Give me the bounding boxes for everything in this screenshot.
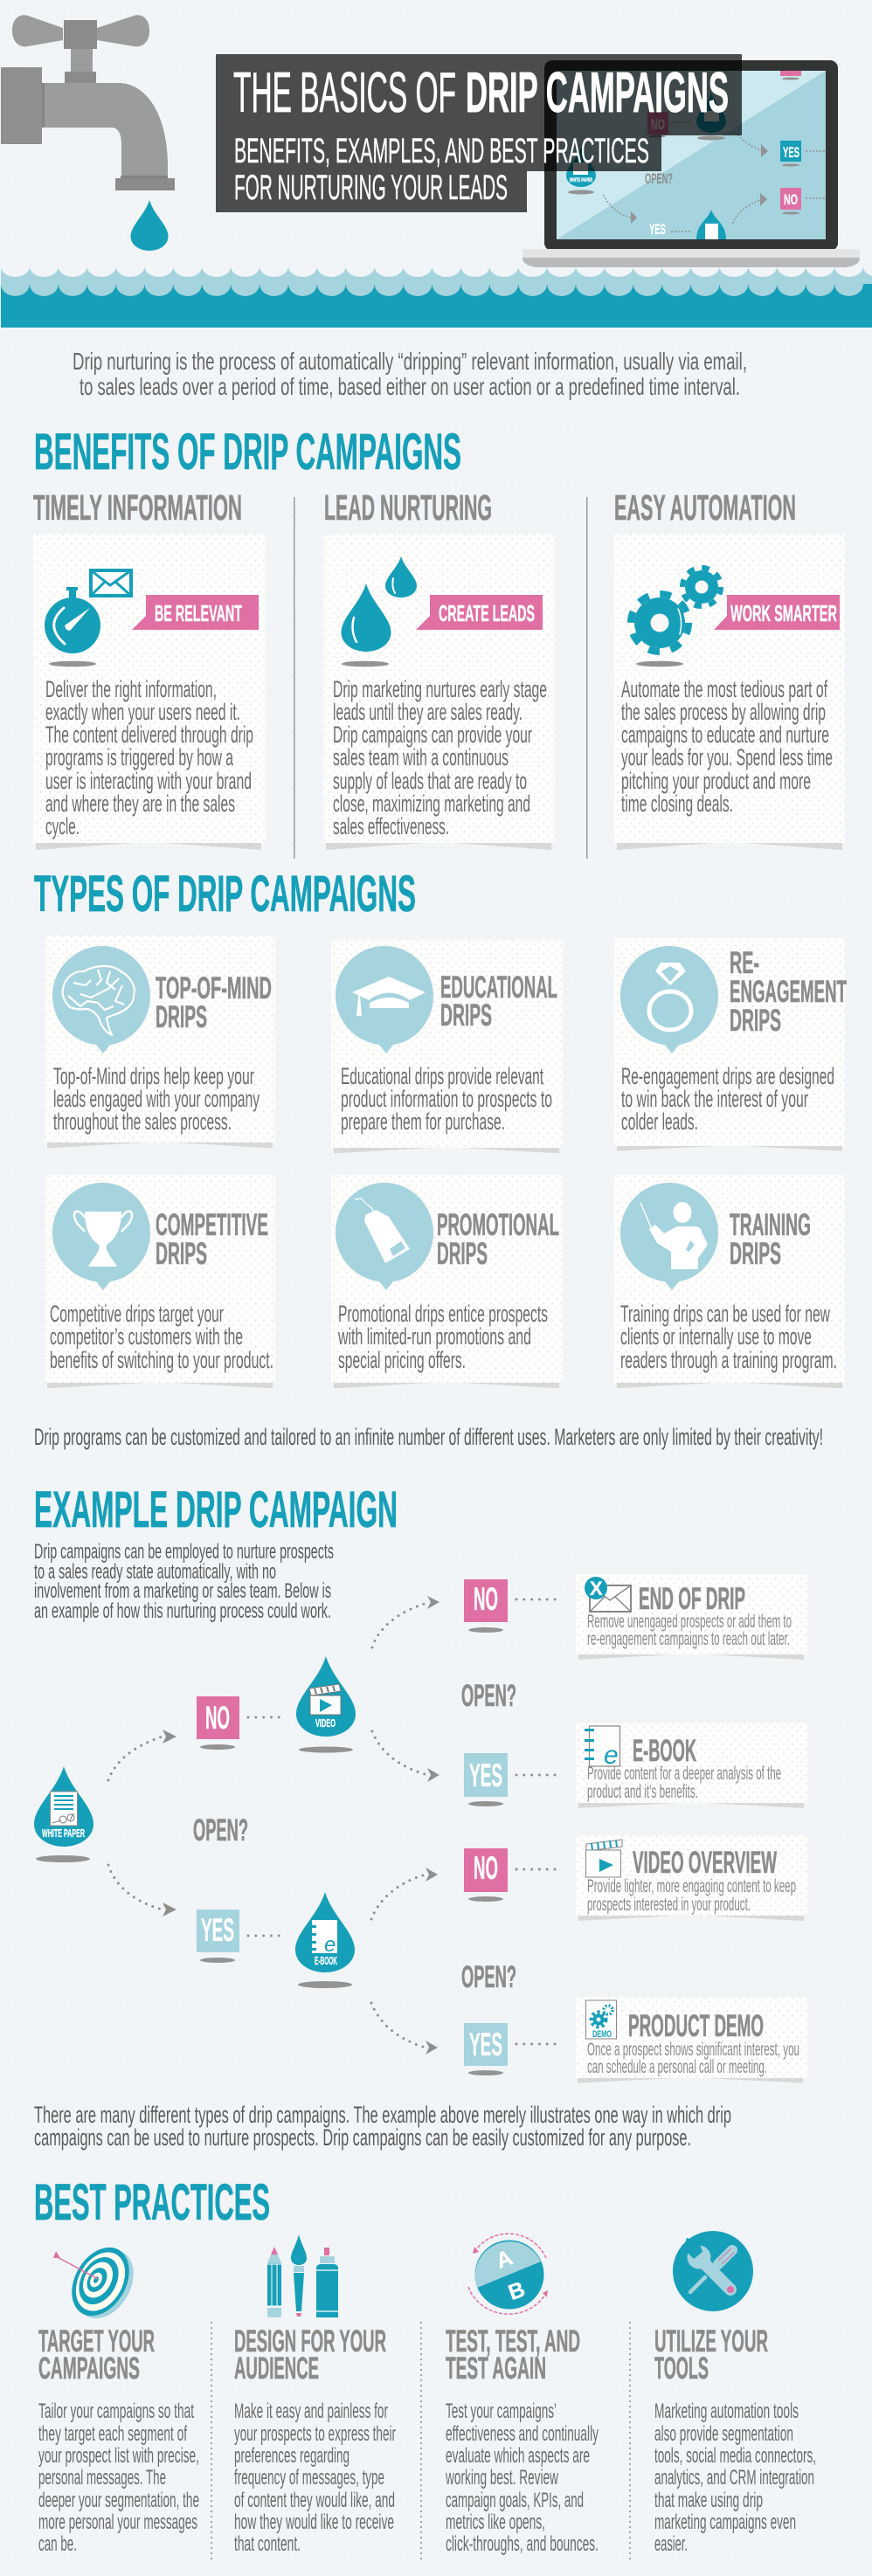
panel: re-engagement drips <box>614 938 847 1151</box>
body text: product information to prospects to <box>341 1086 552 1112</box>
body text: leads engaged with your company <box>53 1086 260 1112</box>
body text: leads until they are sales ready. <box>333 699 523 725</box>
panel: end of drip <box>576 1574 807 1660</box>
icon: ring bubble <box>620 946 718 1053</box>
body text <box>333 676 547 839</box>
panel: educational drips <box>331 940 563 1153</box>
title: UTILIZE YOUR <box>654 2324 768 2358</box>
title: FOR NURTURING YOUR LEADS <box>234 169 508 207</box>
subheading: TIMELY INFORMATION <box>33 487 242 528</box>
body text: user is interacting with your brand <box>45 768 252 794</box>
body text <box>50 1301 273 1373</box>
text: example intro: involvement from a marketing or sales team. Below is <box>34 1579 331 1603</box>
label: open?: OPEN? <box>193 1813 248 1847</box>
box: yes (bottom right) <box>464 2023 556 2075</box>
body text <box>445 2400 599 2556</box>
flow: video drop: VIDEO <box>315 1716 336 1730</box>
title: DRIPS <box>156 1237 207 1271</box>
body text <box>587 1612 792 1649</box>
title <box>446 2324 580 2386</box>
box: no (lower right) <box>464 1848 556 1902</box>
body text: Drip marketing nurtures early stage <box>333 676 547 702</box>
panel: test, test, and test again <box>445 2234 599 2556</box>
box: yes (bottom right): YES <box>469 2027 502 2062</box>
tag: create leads <box>416 595 543 630</box>
icon: a/b circle: A <box>493 2245 516 2274</box>
body text: campaign goals, KPIs, and <box>446 2489 584 2512</box>
heading: benefits: BENEFITS OF DRIP CAMPAIGNS <box>34 424 461 480</box>
faucet <box>1 15 175 190</box>
body text: close, maximizing marketing and <box>333 791 530 817</box>
flow: e-book drop: E-BOOK <box>315 1954 337 1967</box>
title: DRIPS <box>730 1004 781 1038</box>
laptop: YES <box>649 221 666 238</box>
panel: e-book <box>576 1723 807 1808</box>
body text: how they would like to receive <box>234 2510 394 2534</box>
title: AUDIENCE <box>234 2352 319 2386</box>
laptop: NO <box>784 191 798 208</box>
title <box>440 970 557 1032</box>
icon: demo gears <box>585 2000 617 2040</box>
panel: timely information <box>33 487 266 850</box>
body text: click-throughs, and bounces. <box>446 2532 599 2556</box>
body text: Test your campaigns’ <box>446 2400 557 2423</box>
arrow: white paper to yes <box>108 1865 176 1916</box>
title <box>156 971 272 1034</box>
icon: stopwatch and envelope <box>45 570 131 666</box>
box: no (lower right): NO <box>474 1850 498 1886</box>
body text: Educational drips provide relevant <box>341 1063 543 1089</box>
title <box>730 1208 811 1271</box>
icon: notebook <box>585 1726 620 1770</box>
text: example intro: to a sales ready state automatically, with no <box>34 1560 276 1584</box>
body text: of content they would like, and <box>234 2489 395 2512</box>
title <box>216 54 742 212</box>
body text: preferences regarding <box>234 2444 349 2468</box>
text: example summary <box>34 2102 731 2151</box>
body text: special pricing offers. <box>338 1347 466 1373</box>
box: no (top right) <box>464 1579 556 1633</box>
body text: throughout the sales process. <box>53 1108 232 1135</box>
title: DRIPS <box>437 1237 488 1271</box>
waves <box>1 259 872 328</box>
body text: metrics like opens, <box>446 2510 545 2534</box>
body text: time closing deals. <box>621 791 733 817</box>
icon: envelope with x: X <box>590 1578 603 1599</box>
body text: that content. <box>234 2532 301 2556</box>
flow: e-book drop: e <box>324 1933 336 1957</box>
body text: sales team with a continuous <box>333 744 509 770</box>
arrow: e-book to no <box>371 1868 438 1919</box>
body text: your prospect list with precise, <box>38 2444 199 2468</box>
icon: brain bubble <box>52 946 150 1053</box>
title: COMPETITIVE <box>156 1208 268 1242</box>
title: END OF DRIP <box>639 1582 745 1616</box>
body text: Make it easy and painless for <box>234 2400 388 2423</box>
box: yes (middle): YES <box>201 1912 234 1948</box>
body text: frequency of messages, type <box>234 2466 384 2490</box>
body text <box>621 676 833 817</box>
body text <box>45 676 253 839</box>
panel: design for your audience <box>234 2234 396 2556</box>
title: DRIPS <box>440 998 492 1032</box>
body text <box>341 1063 552 1135</box>
body text: working best. Review <box>445 2466 558 2490</box>
title <box>156 1208 268 1271</box>
icon: a/b circle <box>468 2234 548 2314</box>
body text: personal messages. The <box>38 2466 166 2490</box>
body text <box>234 2400 396 2556</box>
body text <box>587 1876 796 1915</box>
heading: types: TYPES OF DRIP CAMPAIGNS <box>34 866 416 922</box>
laptop: YES <box>783 144 799 161</box>
title: TARGET YOUR <box>38 2324 155 2358</box>
label: open? lower right: OPEN? <box>461 1960 516 1994</box>
icon: price tag bubble <box>336 1183 433 1290</box>
flow: e-book drop <box>295 1892 355 1988</box>
arrow: video to yes <box>372 1731 439 1782</box>
laptop: OPEN? <box>645 170 673 187</box>
panel: promotional drips <box>331 1175 563 1388</box>
title: TOOLS <box>654 2352 709 2386</box>
body text: easier. <box>654 2532 688 2556</box>
box: yes (upper right): YES <box>469 1758 502 1793</box>
body text: prepare them for purchase. <box>341 1108 505 1135</box>
panel: utilize your tools <box>654 2231 816 2556</box>
title: DESIGN FOR YOUR <box>234 2324 386 2358</box>
body text: cycle. <box>45 813 80 839</box>
icon: demo gears: DEMO <box>592 2029 612 2040</box>
icon: wrench and screwdriver <box>673 2231 753 2311</box>
body text: your prospects to express their <box>234 2422 396 2446</box>
body text: Drip campaigns can provide your <box>333 722 532 748</box>
body text: The content delivered through drip <box>45 722 253 748</box>
body text <box>654 2400 816 2556</box>
arrow: video to no <box>372 1596 439 1647</box>
icon: water drop falling from faucet <box>131 200 168 251</box>
label: open? upper right: OPEN? <box>461 1679 516 1713</box>
tag: create leads: CREATE LEADS <box>439 600 535 626</box>
body text: Competitive drips target your <box>50 1301 224 1327</box>
body text: that make using drip <box>654 2489 763 2512</box>
icon: clapperboard <box>585 1840 622 1877</box>
body text: evaluate which aspects are <box>446 2444 590 2468</box>
panel: video overview <box>576 1835 807 1921</box>
text: example intro <box>34 1540 334 1623</box>
laptop: NO <box>651 116 665 133</box>
body text: benefits of switching to your product. <box>50 1347 273 1373</box>
title: TEST AGAIN <box>446 2352 546 2386</box>
laptop <box>523 60 860 267</box>
body text: Deliver the right information, <box>45 676 217 702</box>
body text: Top-of-Mind drips help keep your <box>53 1063 254 1089</box>
title: PROMOTIONAL <box>437 1208 559 1242</box>
tag: work smarter <box>714 595 840 630</box>
body text: deeper your segmentation, the <box>38 2489 199 2512</box>
body text: supply of leads that are ready to <box>333 768 527 794</box>
body text <box>53 1063 260 1135</box>
body text <box>337 1301 548 1373</box>
title: E-BOOK <box>633 1734 696 1768</box>
panel: target your campaigns <box>38 2237 199 2556</box>
title: THE BASICS OF <box>233 60 456 124</box>
panel: training drips <box>614 1175 845 1388</box>
body text: they target each segment of <box>38 2422 187 2446</box>
title: CAMPAIGNS <box>38 2352 140 2386</box>
title <box>654 2324 768 2386</box>
icon: pencil brush marker <box>267 2234 338 2317</box>
box: no (middle): NO <box>205 1700 230 1736</box>
title: EDUCATIONAL <box>440 970 557 1005</box>
intro text <box>73 348 747 400</box>
panel: competitive drips <box>45 1175 275 1388</box>
arrow: e-book to yes <box>371 2003 438 2055</box>
body text: programs is triggered by how a <box>45 744 234 770</box>
flow: white paper drop <box>34 1766 93 1862</box>
box: no (middle) <box>197 1696 287 1750</box>
icon: trophy bubble <box>52 1183 150 1290</box>
panel: top-of-mind drips <box>45 936 275 1148</box>
box: yes (upper right) <box>464 1753 556 1806</box>
heading: best practices: BEST PRACTICES <box>34 2174 270 2231</box>
text: example intro: an example of how this nurturing process could work. <box>34 1599 331 1623</box>
text: example intro: Drip campaigns can be employed to nurture prospects <box>34 1540 334 1564</box>
body text: can be. <box>38 2532 77 2556</box>
icon: target <box>53 2237 145 2329</box>
tag: be relevant: BE RELEVANT <box>155 600 242 626</box>
title: DRIPS <box>156 1000 207 1034</box>
title: DRIPS <box>730 1237 781 1271</box>
title: TEST, TEST, AND <box>446 2324 580 2358</box>
title: TOP-OF-MIND <box>156 971 272 1005</box>
body text: exactly when your users need it. <box>45 699 240 725</box>
body text: with limited-run promotions and <box>337 1323 531 1350</box>
flow: video drop <box>296 1656 356 1752</box>
icon: two drops <box>341 556 417 666</box>
icon: envelope with x <box>585 1577 631 1612</box>
body text: more personal your messages <box>38 2510 197 2534</box>
subheading: LEAD NURTURING <box>324 487 492 528</box>
body text <box>620 1301 837 1373</box>
title <box>38 2324 155 2386</box>
body text: Tailor your campaigns so that <box>38 2400 194 2423</box>
panel: product demo <box>576 1997 807 2083</box>
icon: trainer bubble <box>620 1183 718 1290</box>
body text: Promotional drips entice prospects <box>338 1301 548 1327</box>
title <box>730 946 847 1038</box>
body text: competitor’s customers with the <box>50 1323 243 1350</box>
body text: product and it’s benefits. <box>587 1782 698 1802</box>
icon: graduation cap bubble <box>336 946 433 1053</box>
panel: easy automation <box>614 487 845 850</box>
title <box>234 2324 386 2386</box>
box: no (top right): NO <box>474 1581 498 1617</box>
body text <box>38 2400 199 2556</box>
arrow: white paper to no <box>108 1730 176 1780</box>
body text: and where they are in the sales <box>45 791 235 817</box>
body text <box>587 2040 799 2077</box>
tag: be relevant <box>132 595 259 630</box>
laptop: WHITE PAPER <box>570 178 592 183</box>
body text: effectiveness and continually <box>446 2422 599 2446</box>
icon: notebook: e <box>604 1741 619 1770</box>
title <box>437 1208 559 1271</box>
icon: a/b circle: B <box>505 2277 529 2305</box>
icon: gears <box>631 568 721 666</box>
heading: example: EXAMPLE DRIP CAMPAIGN <box>34 1481 398 1538</box>
body text: sales effectiveness. <box>333 813 449 839</box>
body text <box>621 1063 834 1135</box>
flow: white paper drop: WHITE PAPER <box>42 1827 85 1840</box>
title: RE- <box>730 946 759 980</box>
body text: colder leads. <box>621 1108 698 1135</box>
panel: lead nurturing <box>323 487 555 850</box>
body text <box>587 1764 781 1802</box>
box: yes (middle) <box>197 1910 287 1963</box>
